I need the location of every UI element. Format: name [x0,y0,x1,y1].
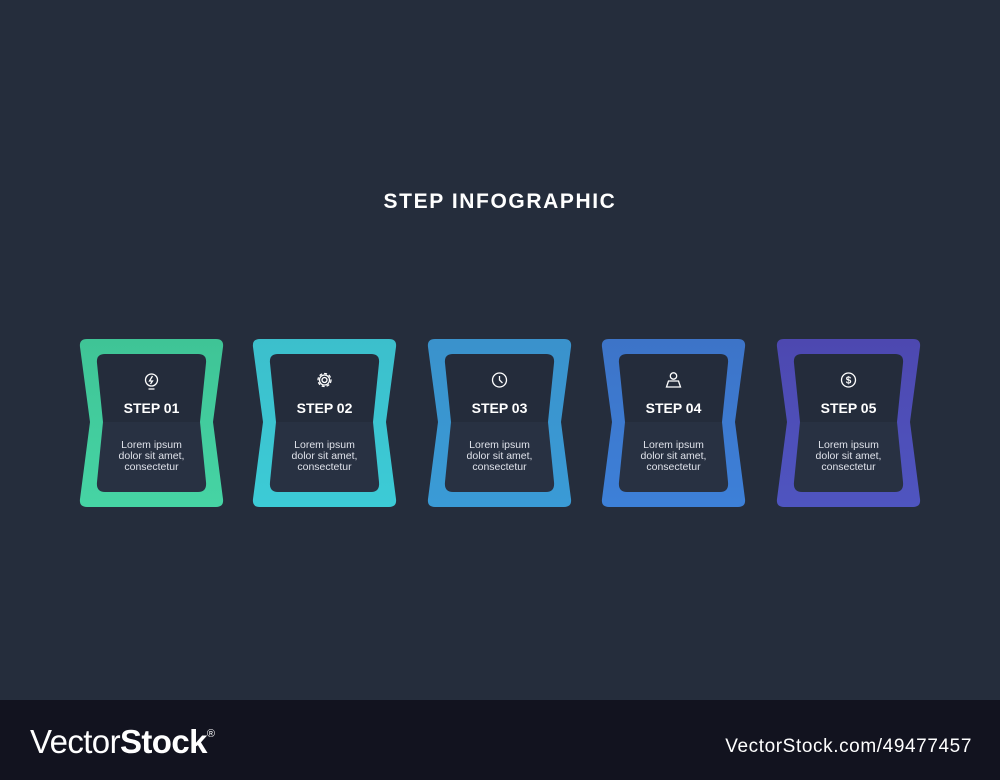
heading: STEP 02 [297,400,353,416]
text: dolor sit amet, [467,450,532,462]
step 02 [253,339,396,507]
icon: gear [318,374,331,386]
text: Lorem ipsum [643,439,704,451]
footer bar [0,700,1000,780]
step 01 [80,339,223,507]
icon: user [666,373,680,387]
text: consectetur [472,461,527,473]
text: dolor sit amet, [641,450,706,462]
text: Lorem ipsum [469,439,530,451]
step 04 [602,339,745,507]
icon: bulb [146,374,158,389]
step 03 [428,339,571,507]
footer id: VectorStock.com/49477457 [725,736,972,757]
heading: STEP 01 [124,400,180,416]
text: dolor sit amet, [119,450,184,462]
text: Lorem ipsum [121,439,182,451]
text: consectetur [821,461,876,473]
text: Lorem ipsum [818,439,879,451]
icon: dollar [842,373,856,387]
text: dolor sit amet, [816,450,881,462]
text: dolor sit amet, [292,450,357,462]
text: consectetur [646,461,701,473]
icon: dollar: $ [846,376,852,386]
text: consectetur [297,461,352,473]
heading: STEP 03 [472,400,528,416]
icon: clock [492,373,506,387]
heading: STEP 05 [821,400,877,416]
text: Lorem ipsum [294,439,355,451]
heading: STEP 04 [646,400,702,416]
footer logo: VectorStock [30,723,207,760]
footer logo: ® [207,728,215,740]
title: STEP INFOGRAPHIC [384,190,616,213]
text: consectetur [124,461,179,473]
step 05 [777,339,920,507]
